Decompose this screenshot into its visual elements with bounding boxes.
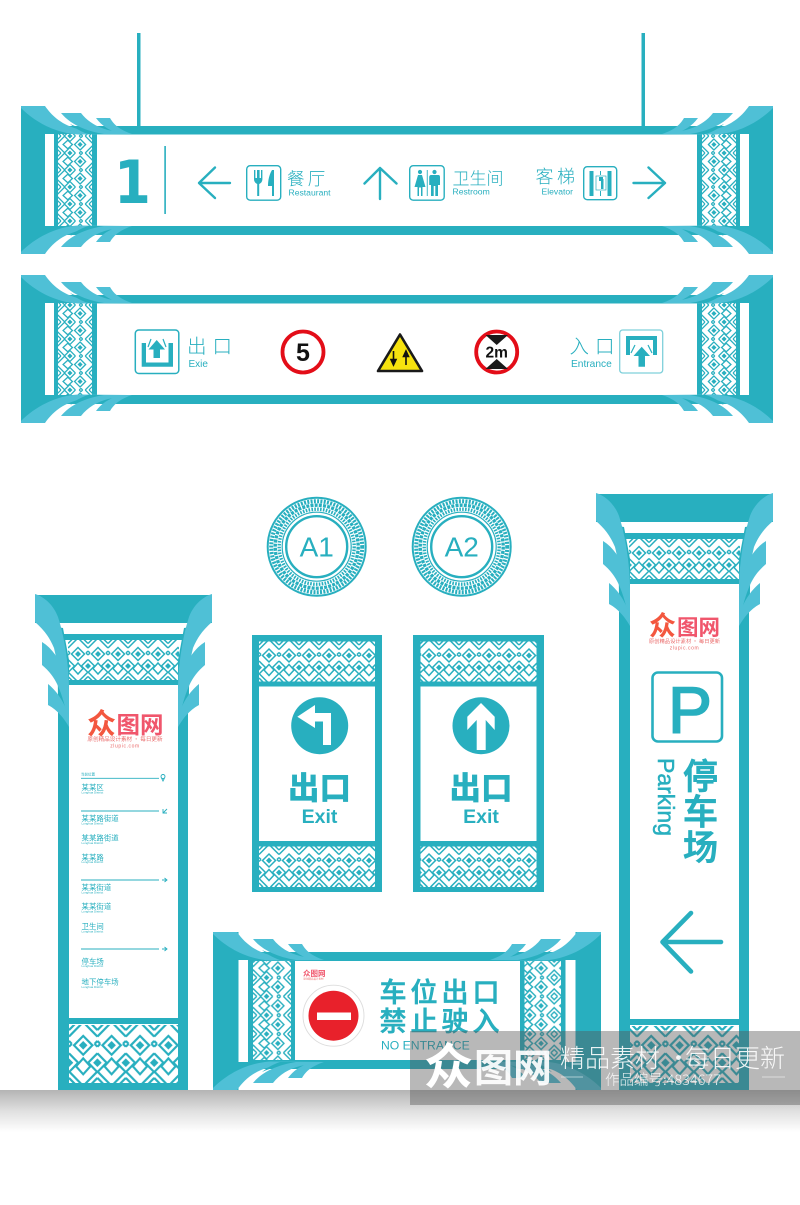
label: elevator: 客梯 — [536, 163, 578, 189]
icon: parking P — [652, 672, 722, 746]
icon: elevator — [584, 167, 617, 200]
label: restaurant: Restaurant — [288, 188, 331, 198]
directory list: Longhua District — [82, 790, 103, 794]
round sign A2 — [413, 498, 511, 596]
divider — [164, 146, 166, 214]
directory list: Longhua District — [82, 985, 103, 989]
label: 停车场: 车 — [683, 784, 718, 836]
directory list: 停车场 — [82, 957, 104, 966]
warning text — [380, 971, 504, 1052]
logo: 图网 — [677, 611, 720, 642]
icon: no entry — [303, 985, 364, 1046]
directory list: 某某街道 — [82, 883, 112, 892]
small logo: 原创精品设计素材 — [303, 976, 324, 980]
floor number 1: 1 — [114, 149, 151, 218]
directory list: 卫生间 — [82, 922, 104, 931]
directory list: Longhua District — [82, 890, 103, 894]
label: exit: Exie — [188, 359, 208, 370]
hanging sign: exit and entrance — [21, 275, 773, 423]
exit label: 出口 — [449, 763, 513, 809]
exit sign: turn left — [252, 635, 382, 892]
directory list: 某某区 — [82, 783, 104, 792]
height limit sign: 2m — [485, 344, 508, 362]
round sign A1: A1 — [300, 532, 334, 562]
directory list: Longhua District — [82, 860, 103, 864]
label: exit: 出口 — [187, 330, 238, 359]
label: entrance: Entrance — [571, 359, 612, 370]
ground shadow — [0, 1090, 800, 1132]
label: 停车场: 场 — [683, 820, 718, 871]
directory list: Longhua District — [82, 910, 103, 914]
label: elevator: Elevator — [542, 186, 573, 196]
logo: 众 — [87, 701, 116, 743]
watermark: 精品素材 — [560, 1039, 660, 1075]
label: entrance: 入口 — [570, 330, 621, 359]
icon: exit — [135, 330, 179, 374]
watermark — [410, 1028, 800, 1105]
speed limit sign: 5 — [296, 339, 310, 367]
directory list: 地下停车场 — [82, 978, 119, 986]
directory list: Longhua District — [82, 930, 103, 934]
exit label: 出口 — [288, 763, 351, 809]
directory list: Longhua District — [82, 822, 103, 826]
warning text: 禁止驶入 — [380, 1000, 504, 1039]
exit label: Exit — [302, 806, 338, 828]
tall parking sign — [596, 493, 773, 1090]
exit sign: straight ahead — [413, 635, 544, 892]
label: 停车场: 停 — [683, 749, 718, 800]
round sign A1 — [268, 498, 366, 596]
height limit sign — [476, 332, 517, 372]
watermark: 众 — [424, 1028, 473, 1099]
arrow left — [199, 168, 230, 198]
round sign A2: A2 — [445, 532, 479, 562]
arrow left — [662, 913, 721, 972]
watermark: 图网 — [474, 1038, 552, 1094]
small logo: 众图网 — [303, 968, 326, 979]
logo: 图网 — [116, 706, 164, 740]
exit label: Exit — [463, 806, 499, 828]
logo: zlupic.com — [110, 744, 140, 750]
label: Parking: Parking — [653, 758, 679, 836]
directory list: Longhua District — [82, 964, 103, 968]
speed limit sign — [282, 332, 324, 372]
logo — [649, 604, 721, 652]
directory list: 某某路 — [82, 853, 104, 862]
tall directory sign — [35, 594, 212, 1090]
directory list — [81, 772, 167, 989]
icon: restaurant — [247, 166, 281, 200]
hanging rods — [137, 33, 645, 126]
logo: zlupic.com — [670, 646, 699, 652]
watermark: 每日更新 — [685, 1039, 785, 1075]
directory list: 当前位置 — [81, 772, 95, 776]
watermark: 作品编号:4834677 — [605, 1069, 721, 1090]
icon: left-turn arrow — [291, 697, 348, 754]
warning text: NO ENTRANCE — [381, 1038, 470, 1052]
label: restroom: Restroom — [452, 186, 490, 196]
logo: 原创精品设计素材 · 每日更新 — [87, 735, 163, 743]
warning text: 车位出口 — [380, 971, 504, 1010]
icon: restroom — [410, 166, 444, 200]
directory list: Longhua District — [82, 841, 103, 845]
icon: entrance — [620, 330, 663, 373]
icon: parking P: P — [668, 672, 712, 746]
label: restaurant: 餐厅 — [287, 166, 328, 191]
directory list: 某某街道 — [82, 902, 112, 911]
arrow right — [634, 168, 665, 198]
hanging sign: floor 1 directory — [21, 106, 773, 254]
directory list: 某某路街道 — [82, 814, 119, 823]
logo: 原创精品设计素材 · 每日更新 — [649, 637, 721, 645]
arrow up — [364, 168, 396, 199]
directory list: 某某路街道 — [82, 834, 119, 842]
icon: up arrow — [452, 697, 510, 754]
logo — [87, 701, 164, 750]
label: restroom: 卫生间 — [452, 164, 504, 190]
watermark: · — [666, 1039, 691, 1075]
logo: 众 — [649, 604, 676, 644]
no entrance sign — [213, 932, 601, 1090]
warning triangle sign — [378, 334, 422, 371]
